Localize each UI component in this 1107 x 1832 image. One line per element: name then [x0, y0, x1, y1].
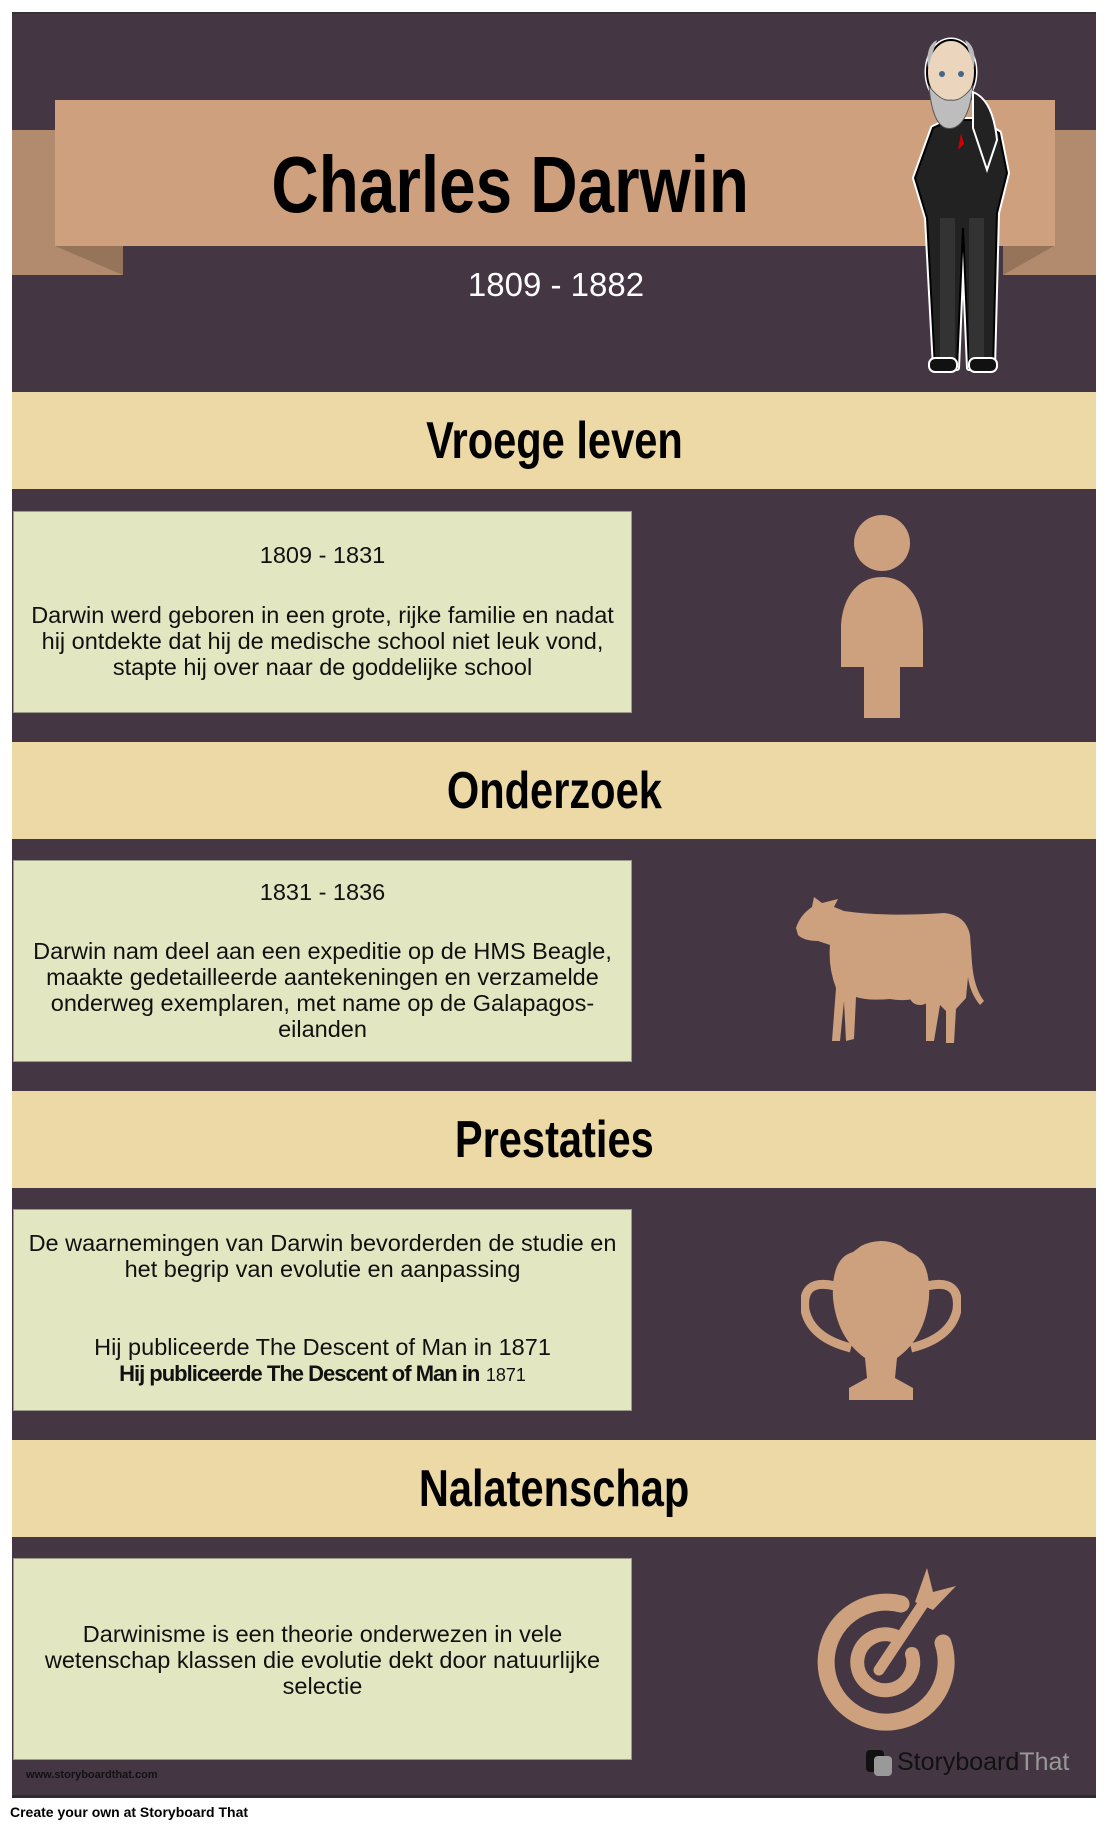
text box: achievements: [13, 1209, 632, 1411]
footer caption: Create your own at Storyboard That: [10, 1804, 248, 1820]
text box: legacy: Darwinisme is een theorie onderwezen in vele: [83, 1621, 562, 1647]
section header: Vroege leven: [12, 392, 1096, 489]
text box: research: [13, 860, 632, 1062]
ribbon tail left: [12, 130, 123, 275]
text box: early life: 1809 - 1831: [260, 542, 385, 568]
text box: legacy: wetenschap klassen die evolutie dekt door natuurlijke: [45, 1647, 600, 1673]
section header: Onderzoek: Onderzoek: [446, 762, 661, 820]
illustration: Charles Darwin: [912, 38, 1010, 373]
text box: early life: Darwin werd geboren in een grote, rijke familie en nadat: [31, 602, 614, 628]
section header: Onderzoek: [12, 742, 1096, 839]
section header: Vroege leven: Vroege leven: [426, 412, 682, 470]
text box: early life: stapte hij over naar de goddelijke school: [113, 654, 532, 680]
section header: Nalatenschap: Nalatenschap: [419, 1460, 689, 1518]
icon: trophy: [801, 1241, 961, 1400]
icon: target: [818, 1568, 956, 1731]
text box: early life: [13, 511, 632, 713]
text box: achievements: het begrip van evolutie en aanpassing: [125, 1256, 520, 1282]
text box: achievements: De waarnemingen van Darwin bevorderden de studie en: [29, 1230, 616, 1256]
title: Charles Darwin: [271, 140, 749, 229]
text box: achievements: Hij publiceerde The Descent of Man in 1871: [94, 1334, 551, 1360]
footer url: www.storyboardthat.com: [26, 1769, 158, 1781]
icon: cow: [796, 897, 984, 1043]
text box: achievements: 1871: [486, 1365, 526, 1385]
text box: legacy: selectie: [283, 1673, 362, 1699]
text box: research: maakte gedetailleerde aantekeningen en verzamelde: [46, 964, 599, 990]
section header: Nalatenschap: [12, 1440, 1096, 1537]
logo: StoryboardThat: StoryboardThat: [897, 1748, 1069, 1776]
icon: person: [841, 515, 923, 718]
text box: research: onderweg exemplaren, met name op de Galapagos-: [51, 990, 594, 1016]
text box: early life: hij ontdekte dat hij de medische school niet leuk vond,: [42, 628, 603, 654]
section header: Prestaties: [12, 1091, 1096, 1188]
ribbon tail right: [1003, 130, 1096, 275]
section header: Prestaties: Prestaties: [455, 1110, 653, 1168]
text box: research: eilanden: [278, 1016, 367, 1042]
text box: legacy: [13, 1558, 632, 1760]
ribbon folds: [56, 246, 1054, 275]
title banner: [55, 100, 1055, 246]
text box: research: Darwin nam deel aan een expeditie op de HMS Beagle,: [33, 938, 612, 964]
dates subtitle: 1809 - 1882: [468, 266, 644, 303]
text box: achievements: Hij publiceerde The Descent of Man in: [119, 1361, 479, 1386]
text box: research: 1831 - 1836: [260, 879, 385, 905]
